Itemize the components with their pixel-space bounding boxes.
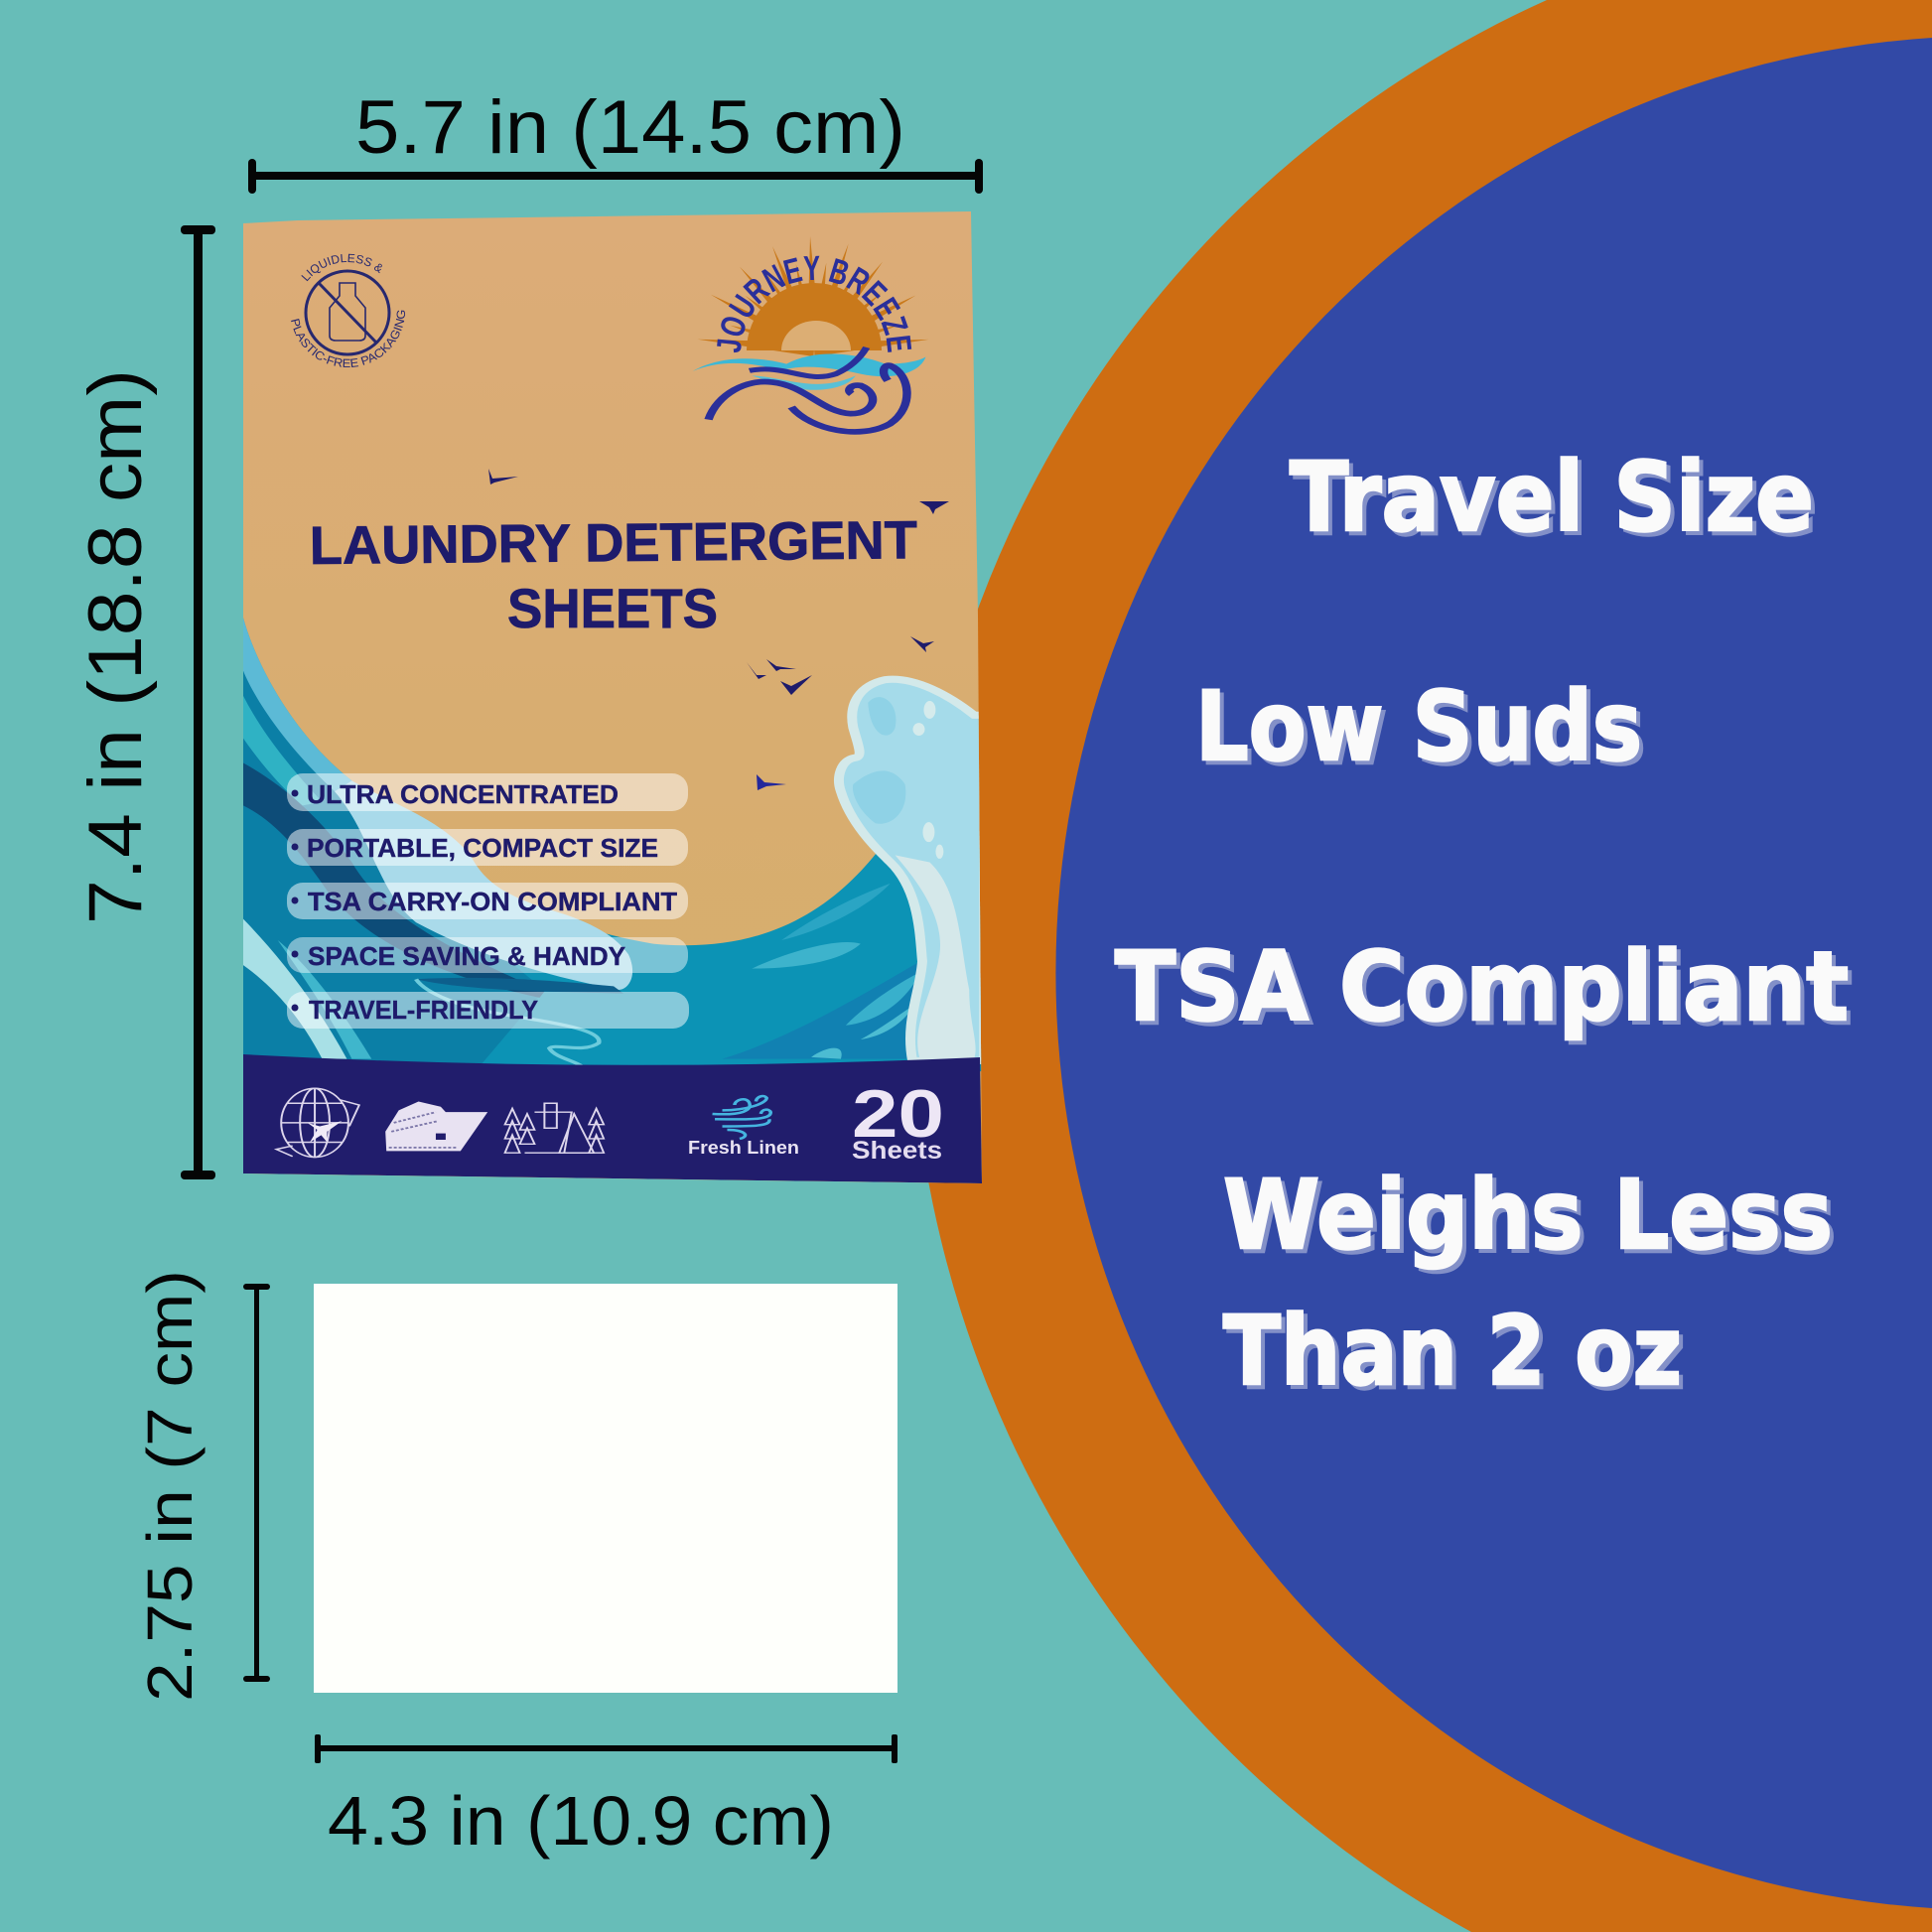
feature list [1115,442,1849,1407]
icon: no bottle badge [291,254,405,367]
benefit pills [287,773,689,1029]
icon: cruise ship [385,1101,487,1151]
sheet width label: 4.3 in (10.9 cm) [328,1782,834,1860]
logo waves [693,347,925,432]
title line 1: LAUNDRY DETERGENT [310,510,917,576]
sheets label: Sheets [852,1137,942,1165]
icon: journey breeze logo [693,236,928,435]
package width arrow [248,159,983,194]
sun disc [747,283,882,350]
product package [238,204,988,1191]
navy band [243,1054,982,1183]
pill 5: TRAVEL-FRIENDLY [309,995,538,1025]
pill 4 [287,937,688,973]
logo name: JOURNEY BREEZE [717,256,911,353]
package base [238,204,988,1191]
feature: weighs less: Weighs Less [1223,1160,1833,1271]
orange outer circle [910,0,1932,1932]
blue inner circle [1055,38,1932,1908]
pill 2: PORTABLE, COMPACT SIZE [307,833,658,863]
wave artwork [243,618,984,1071]
bottle outline [330,283,365,341]
package width label: 5.7 in (14.5 cm) [355,85,905,170]
icon: birds [488,469,949,790]
sheet height label: 2.75 in (7 cm) [134,1270,206,1702]
feature: low suds: Low Suds [1195,671,1642,782]
icon: cabin and trees [505,1103,604,1153]
sheet height arrow [243,1284,270,1682]
badge circle [306,271,389,354]
pill 3: TSA CARRY-ON COMPLIANT [308,887,677,916]
icon: globe with plane [276,1088,359,1158]
strike line [319,283,376,343]
sheet width arrow [315,1734,897,1763]
fresh linen label: Fresh Linen [688,1138,799,1158]
pill 4: SPACE SAVING & HANDY [308,941,625,971]
badge top text: LIQUIDLESS & [301,254,382,282]
pill 5 [287,992,689,1029]
badge bottom text: PLASTIC-FREE PACKAGING [291,310,405,367]
feature: TSA compliant: TSA Compliant [1115,931,1849,1042]
single sheet [314,1284,897,1693]
package height label: 7.4 in (18.8 cm) [73,369,158,924]
pill 1: ULTRA CONCENTRATED [307,779,619,809]
feature: travel size: Travel Size [1290,442,1814,553]
sun hole [781,321,851,350]
title line 2: SHEETS [507,577,718,639]
feature: than 2 oz: Than 2 oz [1223,1296,1682,1407]
sun rays [697,236,929,356]
package height arrow [181,225,215,1179]
pill 1 [287,773,688,811]
sheet count: 20 [852,1076,944,1152]
icon: wind [713,1096,770,1139]
